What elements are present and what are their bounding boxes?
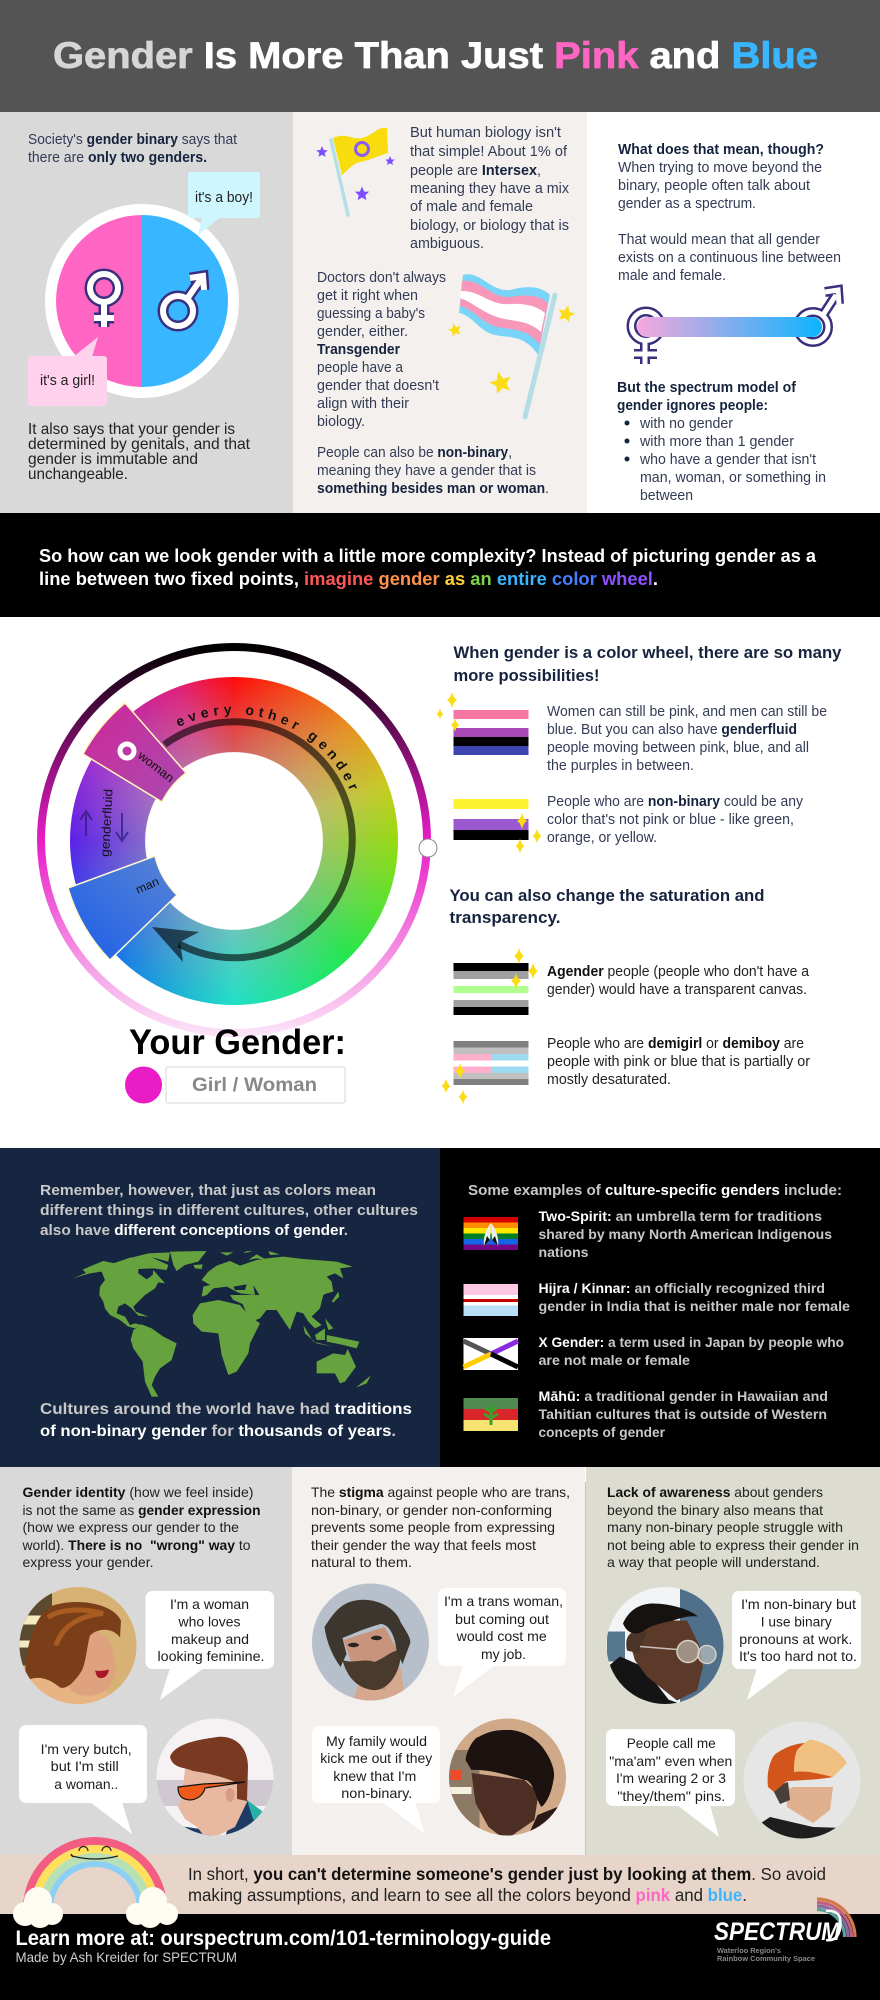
wedge: genderfluid label and arrows: [80, 788, 128, 857]
transgender text: Doctors don't always: [317, 270, 446, 286]
spectrum critique list: with no gender: [639, 416, 733, 432]
photo: person with curly hair: [448, 1717, 568, 1840]
agender text: gender) would have a transparent canvas.: [547, 982, 807, 998]
gender identity text: [22, 1484, 261, 1570]
gender identity text: is not the same as gender expression: [22, 1502, 260, 1518]
stigma text: natural to them.: [311, 1554, 412, 1570]
logo: spectrum: SPECTRUM: [714, 1918, 841, 1946]
genderfluid text: Women can still be pink, and men can still be: [547, 704, 827, 720]
hijra text: Hijra / Kinnar: an officially recognized third: [538, 1280, 825, 1296]
genderfluid text: the purples in between.: [547, 758, 694, 774]
non-binary text: People who are non-binary could be any: [547, 794, 804, 810]
non-binary text: [547, 794, 804, 846]
speech bubble: I'm wearing 2 or 3: [616, 1770, 726, 1786]
cultures intro text: different things in different cultures, other cultures: [40, 1202, 418, 1219]
spectrum critique list: gender ignores people:: [617, 398, 768, 414]
panel: spectrum: [587, 112, 880, 513]
gender identity text: world). There is no "wrong" way to: [22, 1537, 251, 1553]
demigender text: [547, 1036, 810, 1088]
awareness text: not being able to express their gender in: [607, 1537, 859, 1553]
mahu text: [538, 1388, 828, 1440]
intersex text: But human biology isn't: [410, 125, 561, 141]
photo: person with glasses: [605, 1586, 725, 1710]
heading: possibilities: more possibilities!: [454, 667, 600, 685]
speech bubble: [19, 1725, 147, 1834]
banner: color wheel question: So how can we look gender with a little more complexity? Instead of picturing gender as a: [39, 546, 817, 566]
non-binary text: [317, 445, 549, 497]
footer: [0, 1899, 880, 2000]
banner: conclusion: In short, you can't determine someone's gender just by looking at them. So avoid: [188, 1864, 826, 1884]
hijra text: [538, 1280, 850, 1314]
heading: saturation: [450, 887, 764, 927]
spectrum critique list: who have a gender that isn't: [639, 452, 816, 468]
stigma text: non-binary, or gender non-conforming: [311, 1502, 552, 1518]
inner arrow: [152, 722, 352, 962]
panel: cultures: [0, 1148, 440, 1467]
intro text: there are only two genders.: [28, 150, 207, 166]
photo: person with orange hair: [742, 1720, 862, 1840]
demigender text: people with pink or blue that is partially or: [547, 1054, 810, 1070]
cultures intro text: [40, 1182, 418, 1239]
speech bubble: a woman..: [54, 1776, 118, 1792]
speech bubble: "they/them" pins.: [617, 1788, 725, 1804]
heading: saturation: transparency.: [450, 909, 560, 927]
spectrum bar with symbols: [632, 290, 839, 364]
intro text: [28, 132, 237, 166]
flag: agender: [454, 948, 538, 1015]
speech bubble: I'm a woman: [170, 1596, 249, 1612]
spectrum text: [618, 142, 841, 284]
speech bubble: girl: it's a girl!: [40, 373, 95, 389]
photo: bearded person: [310, 1582, 430, 1707]
spectrum text: exists on a continuous line between: [618, 250, 841, 266]
panel: color wheel section: [37, 643, 842, 1104]
non-binary text: People can also be non-binary,: [317, 445, 512, 461]
awareness text: beyond the binary also means that: [607, 1502, 823, 1518]
speech bubble: pronouns at work.: [739, 1631, 852, 1647]
speech bubble: who loves: [178, 1614, 240, 1630]
heading: Some examples of culture-specific genders include:: [468, 1182, 842, 1199]
gender identity text: (how we express our gender to the: [22, 1519, 239, 1535]
speech bubble: boy: [188, 172, 260, 235]
chart: gender color wheel: [37, 643, 438, 1037]
wedge: woman: woman: [134, 748, 177, 785]
binary circle with gender symbols: [45, 204, 239, 398]
credit: Made by Ash Kreider for SPECTRUM: [16, 1949, 237, 1965]
curved label: [179, 714, 357, 812]
speech bubble: People call me: [627, 1735, 716, 1751]
two-spirit text: shared by many North American Indigenous: [538, 1226, 832, 1242]
wedge: man: [68, 856, 177, 960]
flag: hijra: [464, 1284, 518, 1316]
icon: intersex flag: [316, 128, 395, 215]
x gender text: are not male or female: [538, 1352, 690, 1368]
genderfluid text: people moving between pink, blue, and all: [547, 740, 809, 756]
spectrum critique list: between: [640, 488, 693, 504]
gender selector: Girl / Woman: [192, 1075, 317, 1096]
genderfluid text: [547, 704, 827, 774]
transgender text: align with their: [317, 396, 409, 412]
speech bubble: non-binary.: [341, 1785, 412, 1801]
speech bubble: I'm a trans woman,: [444, 1593, 563, 1609]
intersex text: [410, 125, 570, 252]
non-binary text: orange, or yellow.: [547, 830, 657, 846]
transgender text: [317, 270, 446, 430]
cultures closing text: Cultures around the world have had traditions: [40, 1401, 412, 1418]
speech bubble: knew that I'm: [333, 1768, 416, 1784]
flag: x gender: [464, 1338, 518, 1370]
speech bubble: makeup and: [171, 1631, 249, 1647]
spectrum critique list: But the spectrum model of: [617, 380, 796, 396]
transgender text: get it right when: [317, 288, 418, 304]
heading: possibilities: [454, 644, 842, 685]
panel: culture-specific genders: [440, 1148, 880, 1467]
transgender text: Transgender: [317, 342, 400, 358]
stigma text: The stigma against people who are trans,: [311, 1484, 570, 1500]
speech bubble: would cost me: [456, 1628, 547, 1644]
logo: spectrum: [714, 1899, 855, 1963]
intro text: Society's gender binary says that: [28, 132, 237, 148]
intersex text: that simple! About 1% of: [410, 144, 568, 160]
awareness text: many non-binary people struggle with: [607, 1519, 843, 1535]
speech bubble: my job.: [481, 1646, 526, 1662]
spectrum text: binary, people often talk about: [618, 178, 810, 194]
closing text: [28, 421, 251, 483]
banner: conclusion: [0, 1855, 880, 1914]
slider handle: [419, 839, 437, 857]
transgender text: guessing a baby's: [317, 306, 425, 322]
speech bubble: [312, 1726, 440, 1834]
awareness text: Lack of awareness about genders: [607, 1484, 823, 1500]
flag: demigender: [442, 1041, 528, 1104]
intersex text: of male and female: [410, 199, 533, 215]
panel: gender identity: [0, 1467, 292, 1855]
speech bubble: [606, 1729, 735, 1837]
speech bubble: girl: [28, 337, 107, 406]
transgender text: gender that doesn't: [317, 378, 439, 394]
your gender label: Your Gender:: [129, 1023, 346, 1062]
speech bubble: [732, 1591, 861, 1700]
two-spirit text: [538, 1208, 832, 1260]
hijra text: gender in India that is neither male nor female: [538, 1298, 850, 1314]
closing text: unchangeable.: [28, 466, 128, 483]
speech bubble: My family would: [326, 1733, 427, 1749]
speech bubble: I use binary: [761, 1614, 832, 1630]
closing text: determined by genitals, and that: [28, 436, 251, 453]
heading: saturation: You can also change the saturation and: [450, 887, 764, 905]
speech bubble: but coming out: [455, 1611, 549, 1627]
speech bubble: [438, 1588, 566, 1697]
gender identity text: Gender identity (how we feel inside): [22, 1484, 254, 1500]
banner: color wheel question: [0, 513, 880, 617]
flag: mahu: [464, 1398, 518, 1431]
demigender text: People who are demigirl or demiboy are: [547, 1036, 804, 1052]
awareness text: [607, 1484, 859, 1570]
demigender text: mostly desaturated.: [547, 1072, 671, 1088]
speech bubble: kick me out if they: [320, 1750, 432, 1766]
world map: [73, 1251, 371, 1397]
stigma text: [311, 1484, 570, 1570]
intersex text: meaning they have a mix: [410, 181, 570, 197]
photo: woman with auburn hair: [18, 1586, 138, 1706]
heading: possibilities: When gender is a color wheel, there are so many: [454, 644, 842, 662]
non-binary text: meaning they have a gender that is: [317, 463, 536, 479]
logo: spectrum: Waterloo Region's: [717, 1948, 781, 1955]
banner: color wheel question: line between two fixed points, imagine gender as an entire color wheel.: [39, 569, 658, 589]
speech bubble: I'm non-binary but: [741, 1596, 856, 1612]
wedge: genderfluid label and arrows: genderfluid: [98, 788, 116, 857]
speech bubble: I'm very butch,: [41, 1741, 132, 1757]
intersex text: people are Intersex,: [410, 163, 541, 179]
spectrum critique list: man, woman, or something in: [640, 470, 826, 486]
banner: conclusion: making assumptions, and learn to see all the colors beyond pink and blue.: [188, 1885, 747, 1905]
spectrum text: male and female.: [618, 268, 726, 284]
gender selector: [125, 1066, 345, 1104]
transgender text: biology.: [317, 414, 365, 430]
icon: smiling rainbow with clouds: [13, 1841, 178, 1928]
speech bubble: looking feminine.: [158, 1648, 264, 1664]
closing text: It also says that your gender is: [28, 421, 235, 438]
chart: gender color wheel: every other gender: [177, 706, 357, 789]
mahu text: Tahitian cultures that is outside of Western: [538, 1406, 827, 1422]
wedge: man: man: [134, 874, 161, 897]
speech bubble: It's too hard not to.: [739, 1648, 857, 1664]
transgender text: gender, either.: [317, 324, 408, 340]
wedge: woman: [83, 703, 186, 802]
speech bubble: boy: it's a boy!: [195, 190, 253, 206]
mahu text: concepts of gender: [538, 1424, 666, 1440]
spectrum text: gender as a spectrum.: [618, 196, 756, 212]
spectrum text: That would mean that all gender: [618, 232, 820, 248]
spectrum critique list: [617, 380, 826, 504]
speech bubble: but I'm still: [51, 1758, 119, 1774]
panel: stigma: [292, 1467, 586, 1855]
speech bubble: "ma'am" even when: [609, 1753, 732, 1769]
panel: lack of awareness: [586, 1467, 880, 1855]
title banner: [0, 0, 880, 112]
photo: person with sunglasses: [155, 1717, 275, 1837]
cultures closing text: [40, 1401, 412, 1440]
flag: non-binary: [454, 799, 542, 853]
flag: genderfluid: [436, 692, 528, 755]
learn more link: Learn more at: ourspectrum.com/101-terminology-guide: [16, 1927, 551, 1950]
intersex text: biology, or biology that is: [410, 218, 569, 234]
mahu text: Māhū: a traditional gender in Hawaiian and: [538, 1388, 828, 1404]
spectrum text: When trying to move beyond the: [618, 160, 822, 176]
non-binary text: color that's not pink or blue - like green,: [547, 812, 794, 828]
panel: biology: [293, 112, 587, 513]
spectrum critique list: with more than 1 gender: [639, 434, 794, 450]
two-spirit text: nations: [538, 1244, 589, 1260]
icon: trans flag: [447, 274, 577, 417]
non-binary text: something besides man or woman.: [317, 481, 549, 497]
panel: gender binary: [0, 112, 293, 513]
stigma text: their gender the way that feels most: [311, 1537, 536, 1553]
genderfluid text: blue. But you can also have genderfluid: [547, 722, 797, 738]
agender text: [547, 964, 810, 998]
two-spirit text: Two-Spirit: an umbrella term for traditions: [538, 1208, 822, 1224]
intersex text: ambiguous.: [410, 236, 484, 252]
agender text: Agender people (people who don't have a: [547, 964, 810, 980]
cultures intro text: Remember, however, that just as colors mean: [40, 1182, 376, 1199]
logo: spectrum: Rainbow Community Space: [717, 1956, 815, 1963]
cultures closing text: of non-binary gender for thousands of years .: [40, 1423, 396, 1440]
x gender text: [538, 1334, 844, 1368]
gender identity text: express your gender.: [22, 1554, 154, 1570]
transgender text: people have a: [317, 360, 404, 376]
x gender text: X Gender: a term used in Japan by people who: [538, 1334, 844, 1350]
spectrum text: What does that mean, though?: [618, 142, 824, 158]
closing text: gender is immutable and: [28, 451, 198, 468]
awareness text: a way that people will understand.: [607, 1554, 820, 1570]
speech bubble: [146, 1591, 274, 1700]
cultures intro text: also have different conceptions of gender .: [40, 1222, 348, 1239]
stigma text: prevents some people from expressing: [311, 1519, 555, 1535]
flag: two-spirit: [464, 1217, 518, 1250]
title: Gender Is More Than Just Pink and Blue: [53, 35, 818, 76]
